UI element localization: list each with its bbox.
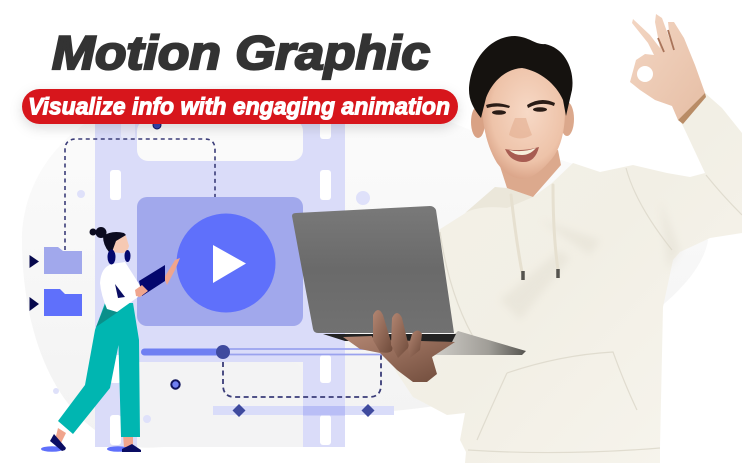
small dot under pill (153, 121, 161, 129)
raised hand (630, 14, 705, 120)
ears (471, 106, 485, 138)
nose shadow (509, 118, 532, 138)
fingers over lid (373, 310, 422, 358)
photo: man with laptop (292, 14, 742, 463)
dashed connector: bottom (223, 355, 381, 397)
hair (469, 36, 573, 118)
illustration: woman (41, 227, 180, 452)
folder: dark (44, 289, 82, 316)
mouth (505, 147, 539, 162)
arrow: second folder (30, 297, 39, 311)
neck (498, 150, 561, 197)
brows and eyes (486, 100, 555, 115)
keyframe track (213, 404, 394, 417)
hoodie (393, 93, 742, 463)
subtitle pill: Visualize info with engaging animation (28, 94, 450, 120)
illustration: film strip (95, 120, 345, 447)
drawstrings (511, 185, 558, 280)
title: Motion Graphic (52, 26, 430, 79)
dashed connector: top (65, 139, 215, 250)
arrow: first folder (30, 255, 39, 268)
folder: light (44, 247, 82, 274)
icon: play button (176, 214, 276, 312)
hood collar (465, 187, 533, 213)
background blob (22, 86, 708, 448)
hoodie folds (440, 168, 742, 453)
timeline slider (141, 345, 392, 359)
laptop lid (292, 206, 454, 333)
face (482, 64, 565, 179)
decorative circles (53, 190, 370, 423)
marker dot (171, 380, 180, 389)
laptop base (433, 331, 526, 355)
video screen panel (137, 197, 303, 326)
hand under laptop (343, 336, 455, 382)
